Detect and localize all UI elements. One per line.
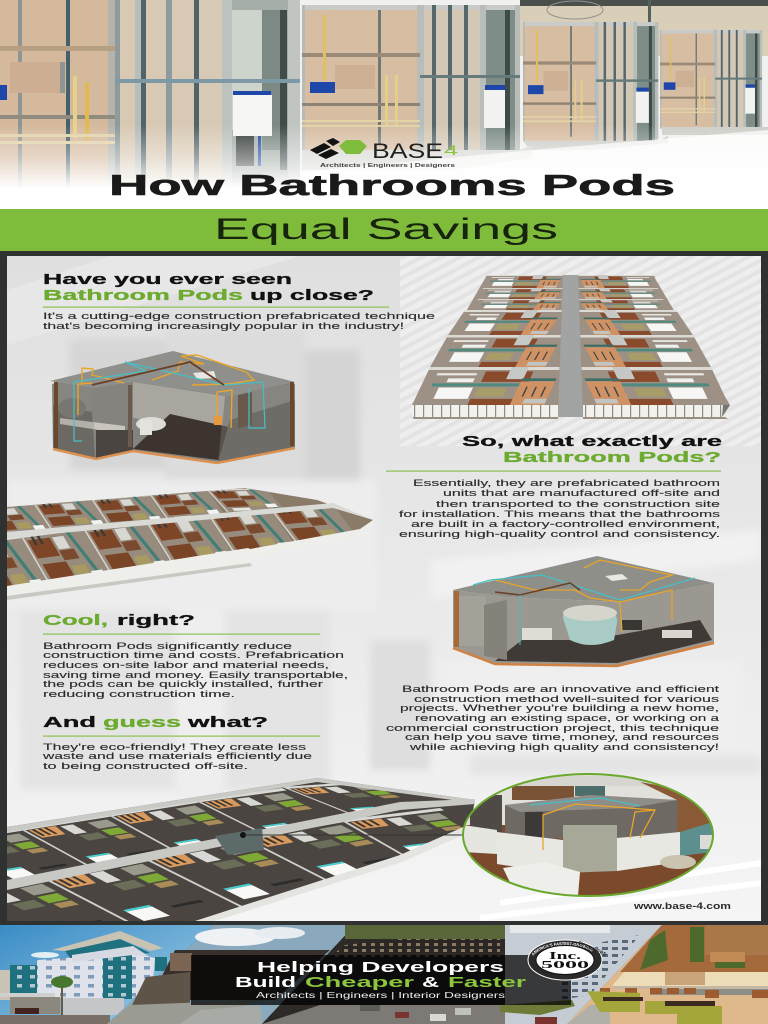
heading: and guess what: guess [103, 715, 181, 731]
heading: cool right: right? [117, 613, 195, 629]
heading: and guess what: what? [186, 715, 268, 731]
text: innovative method: can help you save time, money, and resources [405, 731, 719, 742]
footer photo: cloudy sky and low-rise [107, 925, 355, 1024]
text: essentially: units that are manufactured off-site and [443, 487, 720, 498]
3D pod: L-shaped bathroom with toilet [50, 351, 295, 463]
text: cost reduction: reduces on-site labor and material needs, [43, 659, 329, 670]
text: innovative method: projects. Whether you're building a new home, [400, 702, 719, 713]
footer banner [0, 925, 768, 1024]
text: cost reduction [43, 640, 348, 699]
heading: have you ever seen: Bathroom Pods [43, 288, 243, 304]
text: eco-friendly: to being constructed off-site. [43, 760, 248, 771]
content panel frame [0, 251, 768, 925]
subtitle banner: Equal Savings [214, 213, 558, 246]
3D pod: bathroom with round tub [453, 556, 714, 666]
text: essentially: then transported to the construction site [436, 498, 720, 509]
text: innovative method [386, 683, 720, 752]
heading: so what exactly are [386, 434, 722, 472]
text: intro: that's becoming increasingly popular in the industry! [43, 320, 404, 331]
badge: Inc. 5000: AMERICA'S FASTEST-GROWING [532, 942, 593, 956]
heading: so what exactly are: So, what exactly are [462, 434, 722, 450]
text: essentially [399, 477, 721, 539]
heading: cool right [43, 613, 320, 635]
text: essentially: ensuring high-quality control and consistency. [399, 528, 720, 539]
text: innovative method: while achieving high quality and consistency! [408, 741, 719, 752]
text: eco-friendly [41, 741, 312, 771]
tagline plate: Architects | Engineers | Interior Designers [256, 990, 505, 1000]
badge: Inc. 5000: 5000 [541, 960, 589, 971]
text: innovative method: construction method well-suited for various [414, 693, 720, 704]
text: eco-friendly: waste and use materials efficiently due [41, 750, 312, 761]
badge: Inc. 5000 [528, 940, 608, 980]
floor plan: top right rooms [412, 275, 730, 419]
text: essentially: Essentially, they are prefabricated bathroom [413, 477, 720, 488]
floor plan: dark-floor rooms [7, 778, 475, 921]
text: cost reduction: construction time and costs. Prefabrication [43, 649, 344, 660]
header photo: factory bathroom pods [0, 0, 768, 210]
text: innovative method: Bathroom Pods are an innovative and efficient [402, 683, 720, 694]
footer photo: pale office block [500, 925, 662, 1024]
heading: have you ever seen [43, 272, 389, 308]
footer photo: restaurant interior [567, 925, 768, 1024]
tagline plate: Cheaper [305, 974, 414, 991]
heading: and guess what: And [43, 715, 96, 731]
logo: BASE4 [310, 138, 458, 169]
heading: and guess what [43, 715, 320, 737]
tagline plate: Build [235, 974, 296, 991]
logo: BASE4: 4 [444, 142, 458, 158]
tagline plate: & [422, 974, 439, 991]
text: essentially: are built in a factory-controlled environment, [411, 518, 720, 529]
website: www.base-4.com [633, 901, 731, 911]
badge: Inc. 5000: Inc. [549, 950, 581, 962]
logo: BASE4: Architects | Engineers | Designers [320, 163, 455, 169]
heading: so what exactly are: Bathroom Pods? [503, 450, 721, 466]
logo: BASE4: BASE [372, 140, 443, 163]
text: innovative method: commercial construction project, this technique [386, 722, 719, 733]
floor plan: oblique wood-floor rooms [0, 488, 373, 605]
heading: have you ever seen: up close? [250, 288, 374, 304]
heading: cool right: Cool, [43, 613, 108, 629]
heading: have you ever seen: Have you ever seen [43, 272, 292, 288]
footer photo: dark apartment block [262, 925, 590, 1024]
text: cost reduction: the pods can be quickly installed, further [43, 678, 323, 689]
badge: Inc. 5000: 5X WINNERS [577, 940, 608, 958]
subtitle banner [0, 209, 768, 251]
tagline plate [191, 955, 571, 1005]
circular inset: pod installed in room [463, 774, 713, 896]
text: cost reduction: reducing construction time. [43, 688, 235, 699]
text: intro [43, 310, 435, 331]
text: cost reduction: Bathroom Pods significantly reduce [43, 640, 292, 651]
text: innovative method: renovating an existing space, or working on a [415, 712, 720, 723]
footer photo: hotel under blue sky [0, 925, 213, 1024]
text: cost reduction: saving time and money. Easily transportable, [43, 669, 348, 680]
text: intro: It's a cutting-edge construction prefabricated technique [43, 310, 435, 321]
text: eco-friendly: They're eco-friendly! They create less [43, 741, 307, 752]
text: essentially: for installation. This means that the bathrooms [399, 508, 721, 519]
title: How Bathrooms Pods [109, 170, 675, 202]
panel background [7, 256, 761, 921]
tagline plate: Faster [448, 974, 526, 991]
tagline plate: Helping Developers [257, 959, 504, 976]
